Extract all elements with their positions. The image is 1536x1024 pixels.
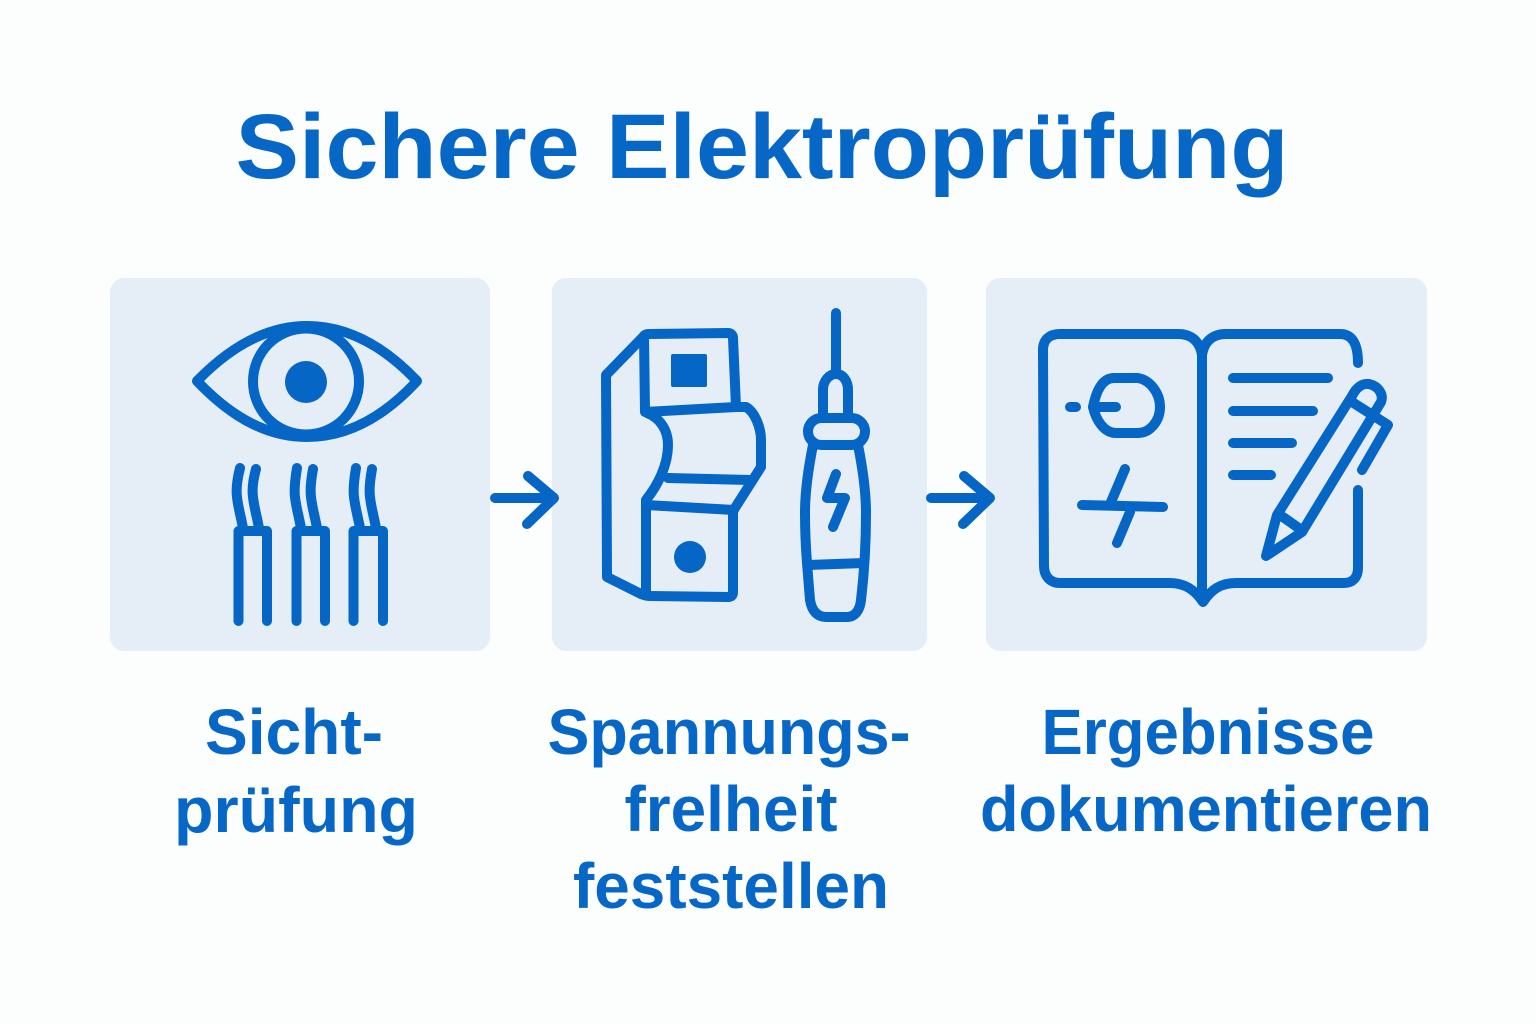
label: Sichtprüfung [174, 696, 418, 846]
label: Spannungsfreiheit feststellen [548, 696, 910, 922]
icon: voltage tester [805, 313, 866, 617]
label: Ergebnisse dokumentieren: dokumentieren [980, 773, 1432, 845]
icon: stripped wires [237, 468, 383, 621]
panel: Ergebnisse [986, 278, 1427, 651]
label: Sichtprüfung: Sicht- [205, 696, 383, 768]
icon: circuit breaker [606, 333, 761, 597]
label: Sichtprüfung: prüfung [174, 774, 418, 846]
label: Ergebnisse dokumentieren: Ergebnisse [1042, 696, 1374, 768]
title: Sichere Elektroprüfung [236, 96, 1288, 198]
arrow 2 [931, 476, 990, 524]
arrow 1 [495, 476, 554, 524]
label: Spannungsfreiheit feststellen: Spannungs- [548, 696, 910, 768]
icon: eye [197, 326, 417, 437]
panel: Spannungsfreiheit [552, 278, 927, 651]
icon: open notebook [1043, 334, 1388, 602]
label: Spannungsfreiheit feststellen: feststellen [573, 850, 889, 922]
label: Spannungsfreiheit feststellen: frelheit [624, 773, 838, 845]
panel: Sichtprüfung [110, 278, 490, 651]
label: Ergebnisse dokumentieren [980, 696, 1432, 845]
